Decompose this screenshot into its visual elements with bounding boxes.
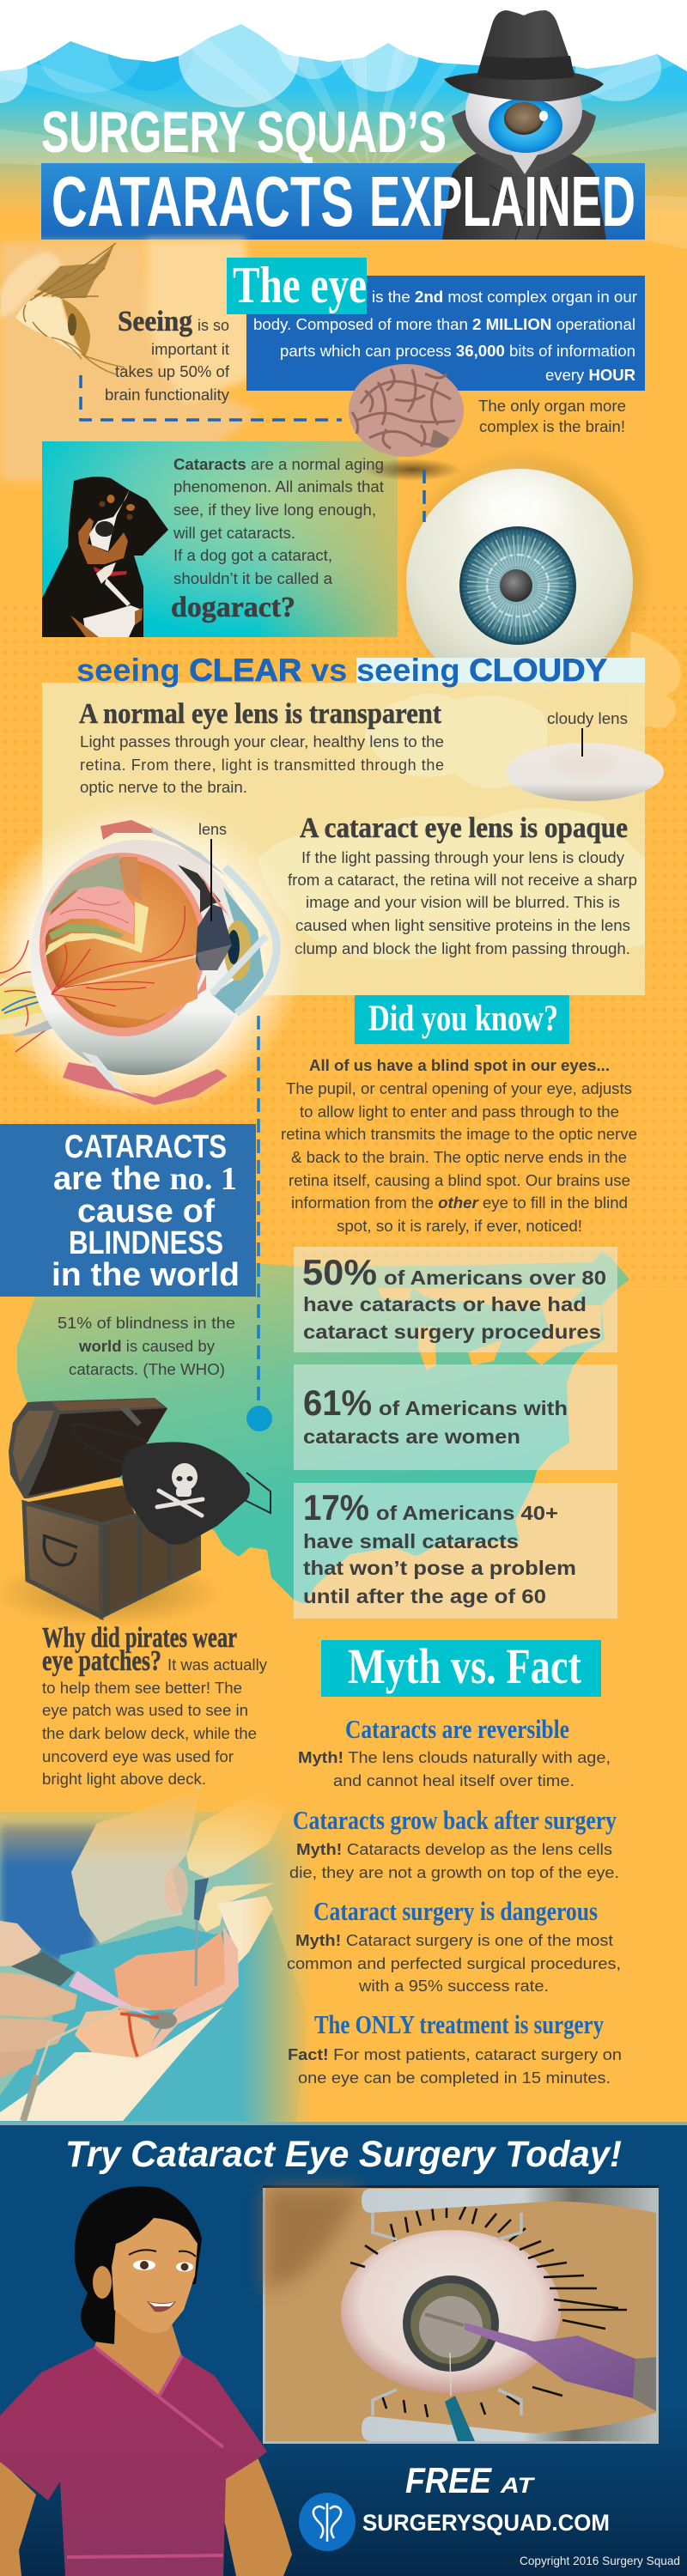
callout: dogaract: dogaract? [171, 592, 295, 623]
panel: statistic 61%: of Americans with [379, 1397, 568, 1419]
text block: brain note: The only organ more [478, 398, 626, 415]
heading: normal eye lens: A normal eye lens is transparent [79, 698, 442, 730]
myth 2: Myth! Cataracts develop as the lens cells [296, 1841, 612, 1858]
panel: statistic 17% [294, 1483, 617, 1619]
panel: blindness headline: BLINDNESS [69, 1225, 223, 1261]
panel: blindness headline: are the no. 1 [53, 1161, 237, 1197]
footer heading: Try Cataract Eye Surgery Today! [65, 2134, 622, 2175]
icon: spy eyeball [465, 64, 582, 156]
upper lid crease [0, 252, 62, 318]
icon: brown pupil [504, 102, 544, 135]
text block: pirates [42, 1622, 267, 1788]
upper white cloth [217, 1896, 273, 1964]
text block: seeing: is so [198, 317, 229, 334]
text block: cataract lens: image and your vision will be blurred. This is [306, 894, 620, 911]
text block: dog fact: will get cataracts. [173, 525, 295, 542]
text block: cataract lens: If the light passing through your lens is cloudy [301, 849, 624, 866]
leader line [581, 728, 583, 756]
text block: eye facts: is the 2nd most complex organ in our [372, 289, 637, 306]
tendon [82, 1052, 140, 1097]
brain shadow [362, 459, 462, 481]
cut-away green wall [46, 854, 125, 913]
copper column [120, 857, 142, 902]
myth 1 [298, 1714, 611, 1789]
dark cataract lens [196, 904, 232, 970]
iris ring [403, 2275, 499, 2372]
arms [0, 2458, 292, 2576]
text block: pirates: eye patch was used to see in [42, 1702, 248, 1719]
footer panel [0, 2122, 687, 2576]
label: cloudy lens: cloudy lens [547, 710, 628, 727]
text block: WHO stat: world is caused by [78, 1338, 215, 1355]
icon: eye highlight [539, 111, 548, 121]
fact: Fact! For most patients, cataract surgery on [288, 2046, 622, 2063]
panel: the eye facts [246, 276, 645, 391]
text block: blind spot: & back to the brain. The optic nerve ends in the [291, 1149, 627, 1166]
cornea outline [225, 867, 277, 1013]
text block: cataract lens: caused when light sensitive proteins in the lens [295, 917, 630, 934]
text block: cataract lens: from a cataract, the retina will not receive a sharp [288, 872, 637, 889]
heading: The eye: The eye [233, 257, 367, 313]
text block: pirates: uncoverd eye was used for [42, 1748, 234, 1765]
teal drape [0, 1915, 309, 2123]
text block: brain note [478, 398, 626, 435]
cornea teal [212, 887, 264, 1013]
dashed connector: seeing to brain [81, 375, 342, 420]
vessels [52, 906, 193, 1006]
chest front right [100, 1498, 199, 1617]
needle holder [194, 1878, 209, 1921]
yellow layer [43, 902, 149, 962]
instrument cone [69, 1971, 152, 2016]
pink fingertip shading [164, 1865, 188, 1913]
pink jagged edge [196, 873, 229, 996]
pale band behind heading [356, 658, 645, 683]
text block: pirates: It was actually [167, 1656, 267, 1674]
call to action: free at: FREE [405, 2460, 493, 2500]
panel: statistic 61%: cataracts are women [303, 1425, 520, 1448]
green strip [49, 923, 123, 940]
surgical eye [149, 2012, 177, 2029]
chest lid [9, 1398, 167, 1498]
ear [93, 2266, 112, 2299]
icon: dog [42, 477, 168, 637]
lower lid skin [75, 2009, 161, 2058]
text block: eye facts: every HOUR [545, 367, 635, 384]
surgery photo [0, 1786, 313, 2123]
lower lashes [52, 337, 125, 374]
text block: blind spot: The pupil, or central opening of your eye, adjusts [286, 1080, 632, 1097]
icon: blue iris [489, 98, 562, 153]
spy eye mascot [442, 10, 606, 240]
title band [41, 163, 645, 240]
text block: blind spot: information from the other eye to fill in the blind [291, 1194, 628, 1212]
text block: blind spot: retina itself, causing a blind spot. Our brains use [289, 1172, 630, 1189]
dotted background texture [0, 601, 687, 1288]
myth 1: Myth! The lens clouds naturally with age, [298, 1749, 611, 1766]
title line: Cataracts Explained: CATARACTS [52, 161, 354, 241]
icon: eye anatomy cutaway [0, 799, 305, 1116]
copyright: Copyright 2016 Surgery Squad [520, 2554, 680, 2567]
heading background [227, 258, 367, 314]
heading: seeing clear vs seeing cloudy: seeing CLEAR vs seeing CLOUDY [76, 653, 607, 688]
text block: dog fact: shouldn’t it be called a [173, 570, 333, 587]
chest front left [24, 1503, 101, 1617]
text block: seeing: takes up 50% of [115, 363, 230, 380]
text block: WHO stat: 51% of blindness in the [58, 1315, 235, 1332]
text block: brain note: complex is the brain! [479, 418, 625, 435]
text block: pirates: to help them see better! The [42, 1680, 242, 1697]
text block: pirates: Why did pirates wear [42, 1622, 237, 1654]
myth 2: Cataracts grow back after surgery [293, 1805, 617, 1835]
text block: dog fact: Cataracts are a normal aging [173, 456, 384, 473]
sclera [30, 840, 250, 1075]
connector end dot [246, 1406, 272, 1431]
icon: Surgery Squad logo [299, 2493, 356, 2551]
myth 1: and cannot heal itself over time. [333, 1772, 575, 1789]
clasp [118, 1406, 142, 1426]
website address: SURGERYSQUAD.COM [362, 2510, 610, 2536]
panel: statistic 50%: 50% [302, 1252, 377, 1292]
text block: pirates: the dark below deck, while the [42, 1725, 257, 1742]
dashed connector: brain to eyeball [423, 470, 426, 522]
text block: cataract lens [288, 849, 637, 957]
soft clouds right of panel [627, 631, 681, 727]
lash mass [37, 245, 114, 298]
top muscle [100, 820, 226, 876]
heading box: did you know: Did you know? [368, 999, 558, 1039]
neck [94, 2310, 182, 2398]
the eye heading tab [227, 257, 645, 391]
pink flap [39, 886, 135, 951]
sky with clouds and rays [0, 0, 687, 249]
panel: blindness headline: CATARACTS [64, 1129, 227, 1165]
myth 3 [287, 1896, 621, 1995]
left hand fingers [0, 1921, 41, 1966]
text block: blind spot [281, 1057, 637, 1235]
text block: dog fact: see, if they live long enough, [173, 501, 376, 519]
blue gown [0, 1825, 103, 1962]
panel: statistic 17%: until after the age of 60 [303, 1585, 546, 1607]
panel: clear vs cloudy [42, 658, 645, 995]
panel: statistic 50%: have cataracts or have had [303, 1293, 587, 1315]
second finger [186, 1792, 286, 1878]
heading: cataract eye lens: A cataract eye lens is opaque [300, 812, 628, 844]
muscle below [63, 1062, 228, 1105]
panel: statistic 50%: of Americans over 80 [384, 1267, 606, 1289]
icon: treasure chest [0, 1398, 223, 1627]
panel: dog fact [42, 441, 398, 637]
lid interior [28, 1408, 167, 1496]
panel: statistic 17%: have small cataracts [303, 1530, 519, 1552]
lower white drape [0, 2007, 223, 2121]
myth 3: Cataract surgery is dangerous [313, 1896, 598, 1926]
lens leader [210, 839, 212, 921]
text block: eye facts [253, 289, 637, 384]
surgical eyeball [341, 2230, 561, 2393]
map of the United States [17, 1251, 629, 1604]
lid side wood [13, 1411, 54, 1483]
icon: shirt [510, 152, 539, 174]
text block: blind spot: to allow light to enter and pass through to the [300, 1103, 619, 1121]
pink flap [142, 1926, 239, 2057]
text block: cataract lens: clump and block the light from passing through. [295, 940, 630, 957]
icon: eye patch [73, 1424, 271, 1545]
face [112, 2218, 198, 2333]
title line: Surgery Squad's: SURGERY SQUAD’S [41, 100, 447, 165]
third finger [195, 1883, 275, 1932]
eyelashes [350, 2205, 627, 2417]
panel: statistic 50%: cataract surgery procedures [303, 1321, 601, 1343]
text block: seeing [105, 306, 230, 404]
text block: eye facts: parts which can process 36,000 bits of information [280, 343, 635, 360]
text block: eye facts: body. Composed of more than 2 MILLION operational [253, 316, 635, 333]
text block: seeing: important it [151, 341, 229, 358]
scrub top [0, 2347, 267, 2576]
chest handle [43, 1535, 77, 1565]
upper eyelid skin [114, 1932, 234, 2012]
text block: normal lens [80, 733, 444, 796]
myth 3: common and perfected surgical procedures, [287, 1955, 621, 1972]
label: lens: lens [198, 821, 227, 838]
panel: blindness headline: cause of [77, 1194, 215, 1230]
text block: seeing: Seeing [118, 306, 192, 337]
black ciliary [178, 865, 221, 913]
text block: WHO stat: cataracts. (The WHO) [69, 1361, 225, 1378]
icon: spy coat [442, 153, 606, 240]
text block: normal lens: optic nerve to the brain. [80, 779, 247, 796]
text block: blind spot: spot, so it is rarely, if ever, noticed! [337, 1218, 582, 1235]
myth 2: die, they are not a growth on top of the eye. [289, 1864, 619, 1881]
surgery simulation image [263, 2185, 659, 2444]
panel: statistic 61% [294, 1364, 617, 1470]
text block: pirates: eye patches? [42, 1645, 161, 1677]
panel: blindness headline: in the world [52, 1257, 240, 1293]
optic nerve [0, 975, 53, 1035]
text block: normal lens: retina. From there, light is transmitted through the [80, 756, 444, 774]
text block: normal lens: Light passes through your clear, healthy lens to the [80, 733, 444, 750]
fade to background [240, 1789, 313, 2123]
icon: cloudy lens [506, 728, 664, 801]
icon: hat band [477, 56, 575, 80]
icon: fedora hat [444, 10, 604, 101]
retractor bars [362, 2188, 656, 2213]
hair [75, 2186, 202, 2344]
myth 3: Myth! Cataract surgery is one of the most [295, 1932, 613, 1949]
heading box: myth vs fact: Myth vs. Fact [348, 1638, 582, 1694]
retina rim [40, 853, 206, 1036]
gold iris [224, 920, 252, 981]
sclera [15, 296, 80, 354]
icon: spy collar [452, 110, 596, 179]
heading box: did you know [355, 995, 569, 1044]
text block: seeing: brain functionality [105, 386, 229, 404]
mouth [147, 2301, 176, 2312]
panel: statistic 17%: of Americans 40+ [376, 1502, 558, 1524]
chest interior [24, 1485, 135, 1524]
icon: brain [349, 364, 464, 457]
gloved hand [71, 1786, 200, 1943]
cloudy lens [419, 2296, 483, 2358]
purple probe [465, 2323, 635, 2398]
icon: coat lapels [489, 185, 558, 240]
myth 3: with a 95% success rate. [358, 1978, 549, 1995]
illustration: nurse [0, 2186, 292, 2576]
lid top wood [52, 1399, 163, 1411]
text block: WHO stat [58, 1315, 235, 1378]
icon: large eyeball [397, 448, 654, 706]
text block: dog fact: phenomenon. All animals that [173, 478, 384, 495]
fact: one eye can be completed in 15 minutes. [298, 2069, 611, 2087]
fact: The ONLY treatment is surgery [314, 2009, 604, 2039]
text block: pirates: bright light above deck. [42, 1771, 206, 1788]
myth 1: Cataracts are reversible [345, 1714, 569, 1744]
instrument handle [11, 1952, 75, 1986]
text block: blind spot: All of us have a blind spot in our eyes... [309, 1057, 610, 1074]
myth 2 [289, 1805, 619, 1881]
text block: dog fact [173, 456, 384, 587]
wire [37, 2007, 149, 2075]
fact [288, 2009, 622, 2087]
panel: statistic 50% [294, 1247, 617, 1352]
call to action: free at: AT [500, 2474, 536, 2498]
panel: statistic 17%: 17% [303, 1487, 369, 1528]
orange inner chamber [46, 860, 200, 1028]
pupil [228, 930, 240, 964]
panel: statistic 17%: that won’t pose a problem [303, 1557, 576, 1579]
dashed connector: eye to chest [257, 1016, 260, 1401]
panel: blindness headline [0, 1124, 256, 1297]
blue syringe [445, 2396, 475, 2441]
eyes [133, 2260, 155, 2270]
text block: dog fact: If a dog got a cataract, [173, 547, 332, 564]
eye photo with skin fade [0, 240, 258, 481]
icon: skull [157, 1463, 203, 1516]
panel: statistic 61%: 61% [303, 1382, 372, 1423]
text block: blind spot: retina which transmits the image to the optic nerve [281, 1126, 637, 1143]
iris [62, 299, 90, 356]
cornea band [212, 936, 266, 993]
